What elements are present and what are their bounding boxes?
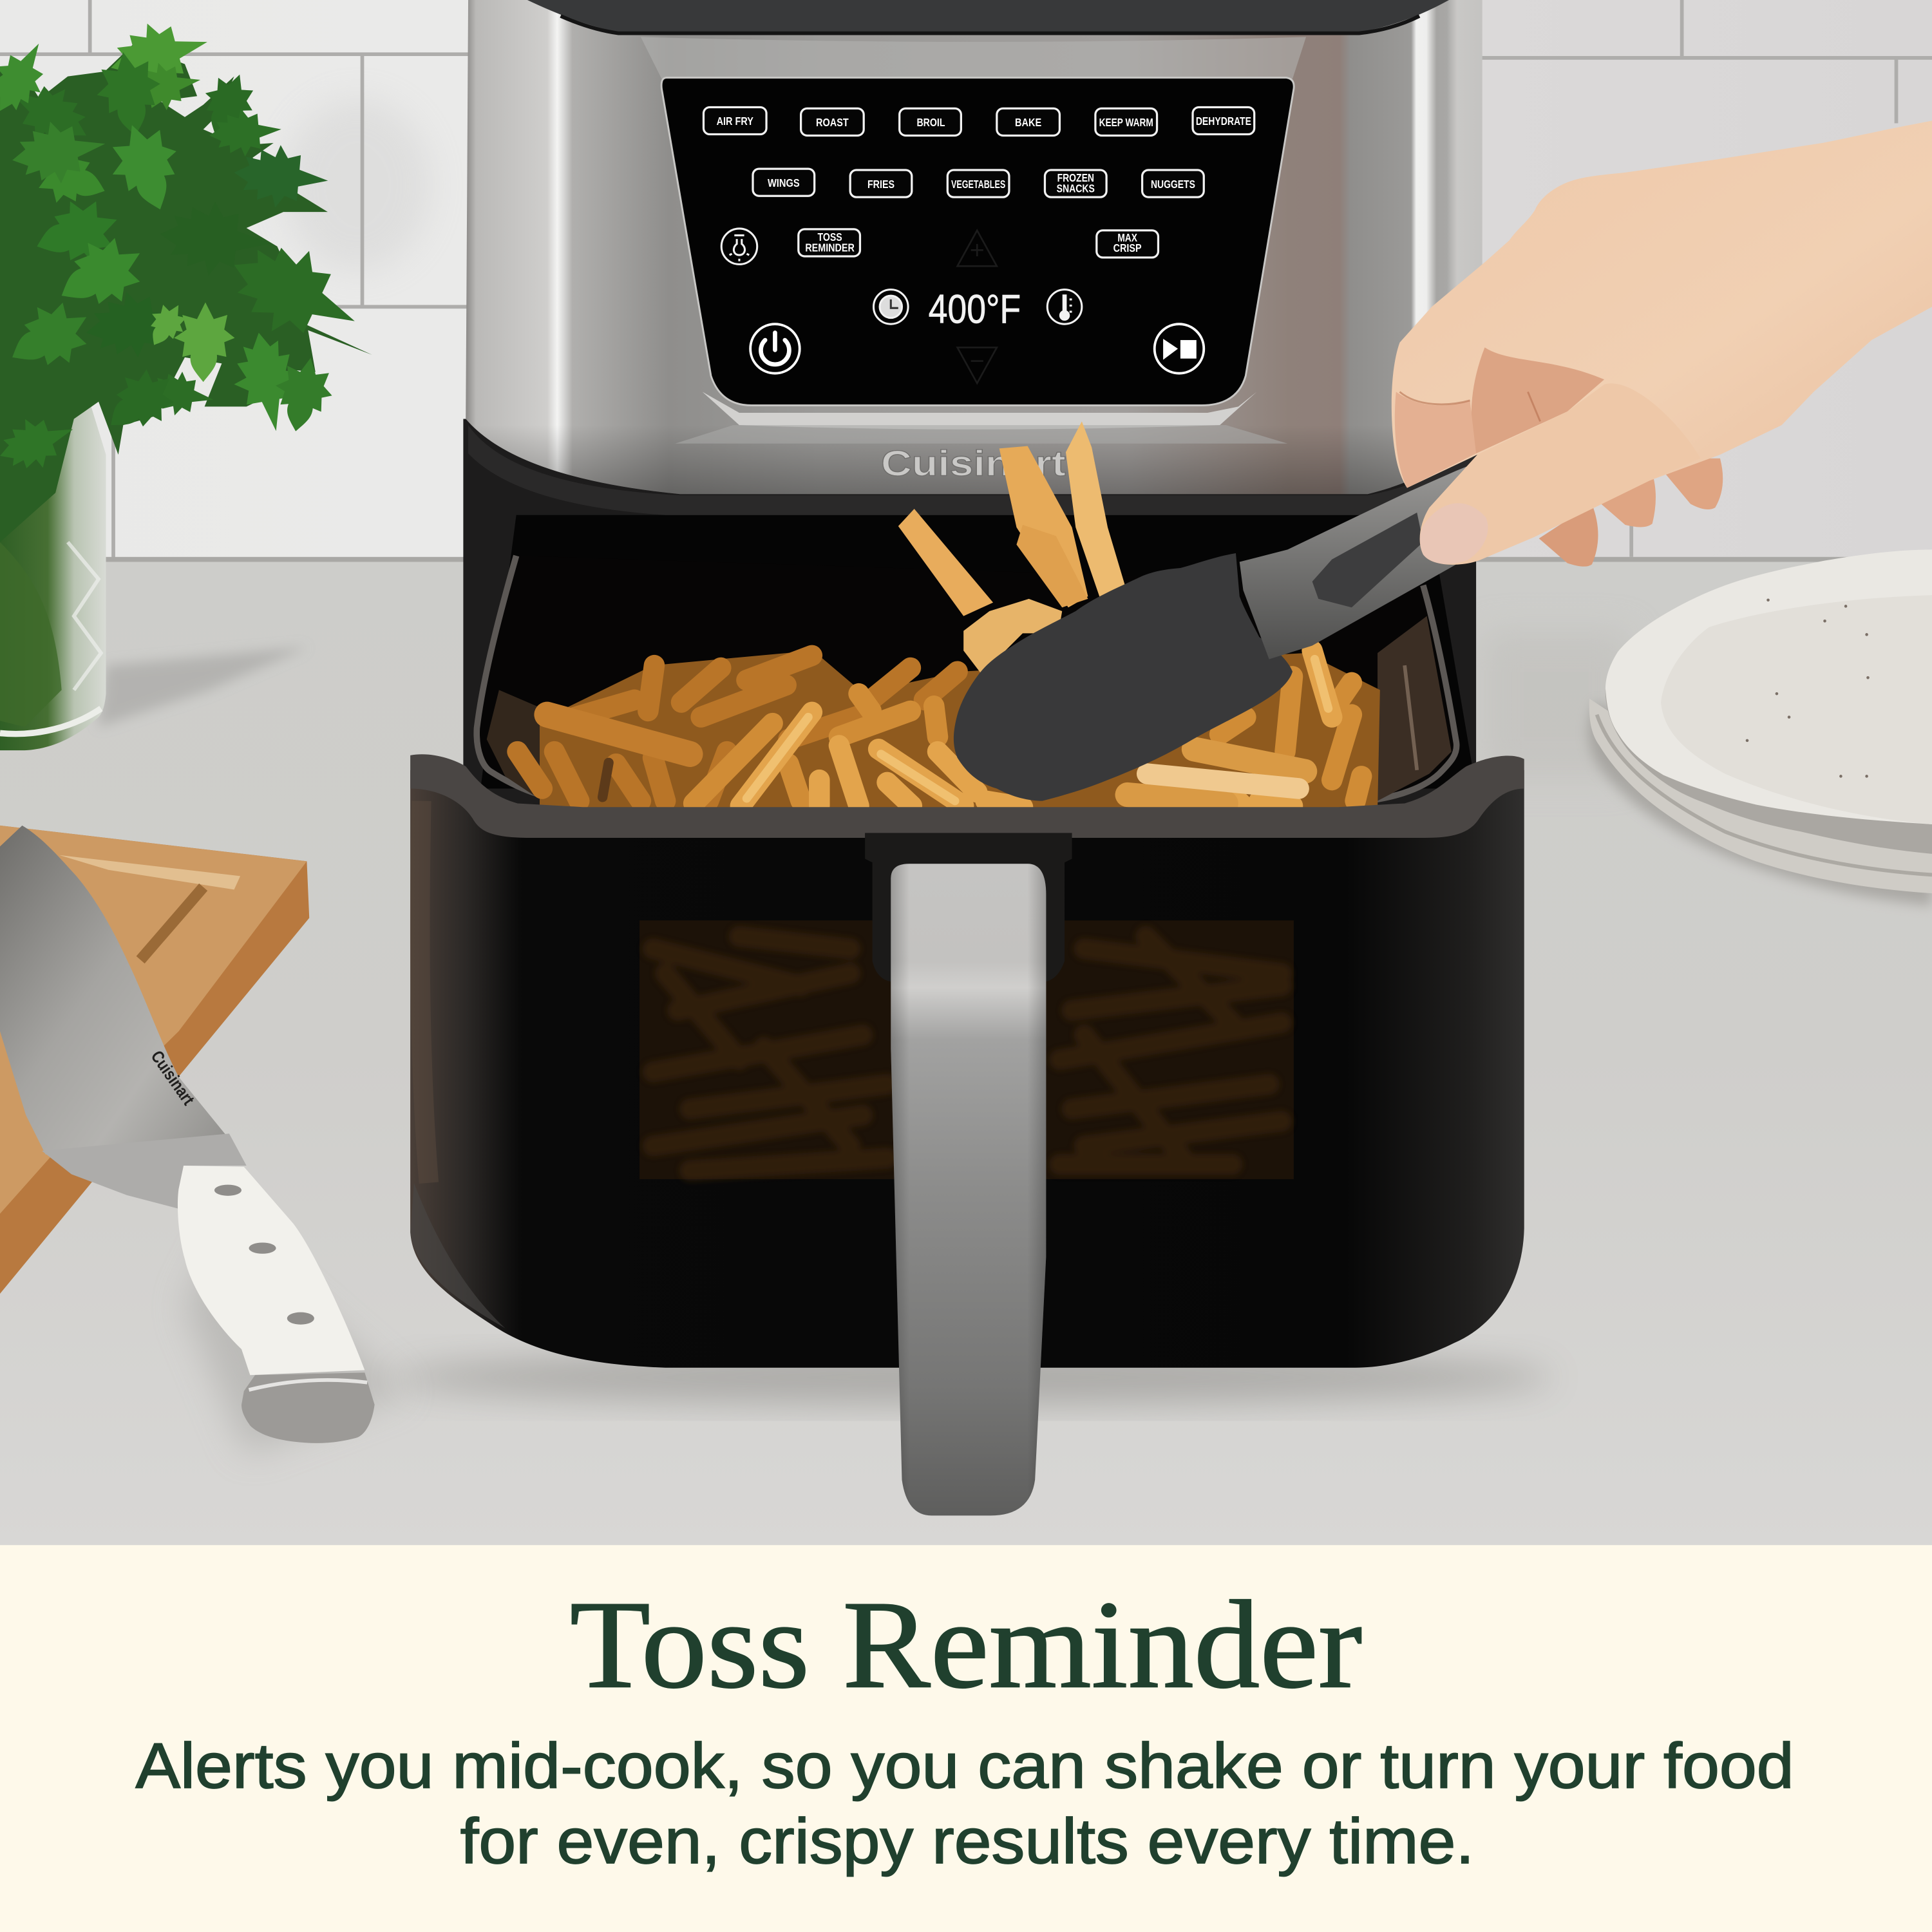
fries base bbox=[540, 650, 1380, 811]
pommel bbox=[242, 1372, 375, 1443]
caption band bbox=[0, 1545, 1932, 1932]
middle finger bbox=[1539, 504, 1598, 567]
control panel: ROAST bbox=[816, 116, 849, 129]
handle socket bbox=[865, 833, 1072, 982]
control panel: WINGS bbox=[768, 176, 800, 189]
counter shadow of air fryer bbox=[394, 1350, 1553, 1405]
Cuisinart logo: Cuisinart bbox=[881, 444, 1066, 484]
stacked plates bbox=[1589, 549, 1932, 905]
tongs holding fries bbox=[898, 421, 1481, 801]
fry window bbox=[639, 920, 1294, 1179]
clock icon bbox=[874, 290, 908, 324]
description: for even, crispy results every time. bbox=[460, 1806, 1474, 1877]
control panel: DEHYDRATE bbox=[1196, 115, 1251, 128]
start stop button bbox=[1155, 324, 1204, 374]
plate well bbox=[1661, 595, 1932, 824]
plus and minus arrows bbox=[958, 231, 997, 383]
pinky finger bbox=[1666, 459, 1723, 509]
background: counter top bbox=[0, 557, 1932, 1546]
parsley leaves bbox=[0, 10, 374, 542]
dark mid housing bbox=[463, 419, 1476, 826]
light icon bbox=[721, 229, 757, 264]
left reflective wall bbox=[487, 690, 542, 801]
lower plate bbox=[1589, 699, 1932, 893]
tong head bbox=[954, 553, 1293, 801]
control panel: MAX bbox=[1117, 231, 1137, 244]
control panel: KEEP WARM bbox=[1099, 116, 1153, 129]
control panel: TOSS bbox=[817, 231, 842, 243]
hand: thumb and nail bbox=[1420, 383, 1700, 565]
control panel: BAKE bbox=[1015, 116, 1041, 129]
silver handle bbox=[891, 864, 1046, 1515]
control panel: REMINDER bbox=[805, 241, 855, 254]
hand: fingers and back of hand bbox=[1392, 121, 1932, 567]
right reflective wall bbox=[1378, 616, 1452, 801]
control panel: VEGETABLES bbox=[951, 178, 1005, 191]
description: Alerts you mid-cook, so you can shake or turn your food bbox=[135, 1730, 1794, 1802]
cutting board bbox=[0, 826, 309, 1294]
band above panel bbox=[641, 37, 1306, 79]
under-steel lip bbox=[468, 425, 1479, 515]
control panel bbox=[661, 78, 1294, 405]
bolster bbox=[42, 1133, 247, 1209]
description bbox=[135, 1730, 1794, 1877]
control panel: BROIL bbox=[916, 116, 945, 129]
back of hand bbox=[1392, 121, 1932, 488]
air fryer body bbox=[463, 0, 1482, 826]
reflection on drawer side bbox=[420, 801, 429, 1183]
glass jar with parsley bbox=[0, 406, 106, 750]
control panel: SNACKS bbox=[1057, 182, 1095, 194]
white handle bbox=[178, 1166, 365, 1375]
basket drawer bbox=[410, 754, 1524, 1515]
lid bbox=[527, 0, 1449, 32]
thermometer icon bbox=[1047, 290, 1082, 324]
curled fingers bbox=[1472, 348, 1604, 453]
control panel: FROZEN bbox=[1057, 171, 1094, 184]
power button bbox=[750, 324, 800, 374]
blade bbox=[0, 826, 227, 1155]
control panel: FRIES bbox=[867, 178, 895, 191]
band below panel bbox=[703, 392, 1257, 430]
lifted fries bbox=[898, 421, 1125, 676]
title: Toss Reminder bbox=[570, 1575, 1362, 1714]
control panel: AIR FRY bbox=[717, 115, 753, 128]
tong grip bbox=[1312, 513, 1423, 607]
upper plate surface bbox=[1605, 549, 1932, 824]
upper plate underside bbox=[1605, 689, 1932, 854]
background: tiled wall bbox=[0, 0, 1932, 579]
control panel: NUGGETS bbox=[1151, 178, 1195, 191]
basket interior with fries bbox=[477, 556, 1457, 811]
rivets bbox=[214, 1185, 314, 1325]
ring finger bbox=[1597, 478, 1656, 527]
mode buttons bbox=[703, 107, 1255, 258]
knife brand: Cuisinart bbox=[147, 1047, 198, 1109]
basket wall bbox=[477, 556, 1457, 803]
drawer rim bbox=[410, 754, 1524, 838]
chef's knife bbox=[0, 826, 406, 1454]
temperature readout: 400°F bbox=[929, 287, 1021, 332]
stainless top housing bbox=[466, 0, 1482, 494]
tong arm bbox=[1240, 461, 1481, 659]
control panel: CRISP bbox=[1113, 242, 1142, 254]
